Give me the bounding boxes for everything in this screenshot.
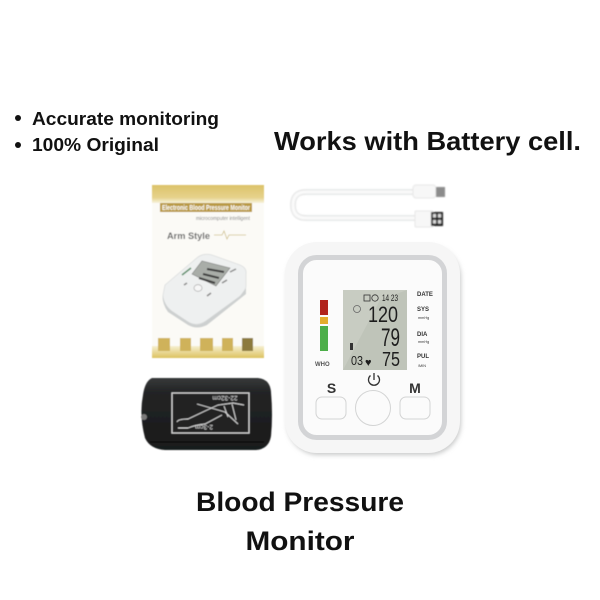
WHO indicator — [315, 300, 330, 368]
LCD diastolic: 79 — [381, 324, 400, 352]
blood pressure cuff — [141, 378, 272, 450]
right-side labels — [417, 292, 433, 368]
product name caption: Monitor — [246, 526, 355, 556]
S button — [316, 380, 346, 419]
power button — [356, 373, 390, 426]
device body — [285, 242, 460, 453]
right-side labels: mmHg — [418, 340, 429, 344]
right-side labels: DIA — [417, 332, 428, 338]
product box — [152, 185, 264, 358]
LCD screen — [343, 290, 407, 371]
WHO indicator: WHO — [315, 362, 330, 368]
right-side labels: /MIN — [418, 364, 426, 368]
LCD pulse: 75 — [382, 349, 400, 371]
box title: Electronic Blood Pressure Monitor — [162, 203, 250, 212]
cuff label panel: 22-32cm — [212, 394, 238, 401]
blood pressure monitor device — [285, 242, 461, 455]
heading: battery note: Works with Battery cell. — [274, 126, 581, 156]
LCD memory count: 03 — [351, 353, 363, 368]
box heart line — [214, 231, 246, 239]
bullet: 100% original: 100% Original — [32, 135, 159, 155]
LCD systolic: 120 — [368, 302, 398, 327]
right-side labels: mmHg — [418, 316, 429, 320]
cuff label panel: 2-3cm — [195, 423, 213, 430]
box device illustration — [163, 254, 246, 328]
box subtitle: microcomputer intelligent — [196, 216, 251, 222]
product name caption: Blood Pressure — [196, 487, 404, 517]
LCD heart icon: ♥ — [365, 357, 372, 369]
S button: S — [327, 380, 336, 396]
right-side labels: DATE — [417, 292, 433, 298]
M button: M — [409, 380, 421, 396]
USB cable — [293, 185, 445, 227]
box feature icons — [158, 338, 253, 351]
M button — [400, 380, 430, 419]
feature bullet list — [15, 109, 219, 155]
box arm style label: Arm Style — [167, 231, 210, 241]
product name caption — [196, 487, 404, 556]
cuff label panel — [172, 393, 249, 433]
right-side labels: PUL — [417, 354, 429, 360]
LCD time: 14 23 — [382, 293, 398, 303]
right-side labels: SYS — [417, 307, 429, 313]
bullet: accurate monitoring: Accurate monitoring — [32, 109, 219, 129]
